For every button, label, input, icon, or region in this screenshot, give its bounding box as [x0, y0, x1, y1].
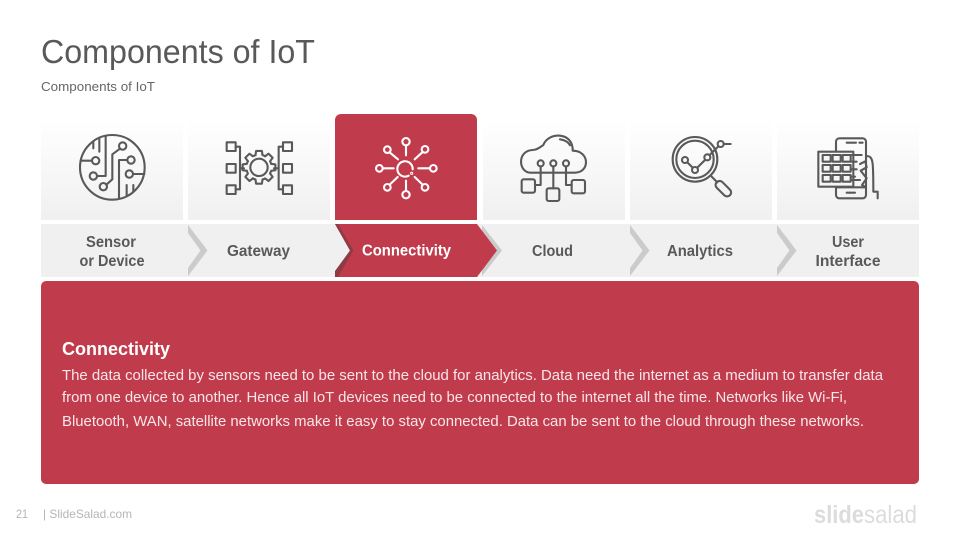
active step arrow: [335, 224, 497, 277]
icon cards: [41, 114, 919, 220]
panel: connectivity description: [41, 281, 919, 484]
icon: sensor circuit: [80, 135, 145, 200]
footer site name: | SlideSalad.com: [43, 507, 132, 521]
panel body text: The data collected by sensors need to be sent to the cloud for analytics. Data need the internet as a medium to transfer data: [62, 368, 883, 384]
label: cloud: Cloud: [532, 243, 573, 260]
label row background: [41, 224, 919, 277]
logo: slidesalad: slide: [814, 501, 864, 529]
icon: cloud network: [521, 136, 586, 201]
icon: gateway gear: [227, 142, 292, 194]
label: gateway: Gateway: [227, 243, 290, 260]
label: sensor: Sensor: [86, 234, 136, 251]
logo: slidesalad: [814, 501, 917, 529]
label: user: User: [832, 234, 864, 251]
label: connectivity: Connectivity: [362, 242, 451, 260]
logo: slidesalad: salad: [864, 501, 917, 529]
label: or device: or Device: [80, 253, 145, 270]
panel heading: Connectivity: [62, 338, 171, 359]
icon: analytics magnifier: [673, 137, 733, 198]
chevron arrows: [188, 225, 796, 276]
panel body text: from one device to another. Hence all IoT devices need to be connected to the internet all the time. Networks like Wi-Fi,: [62, 390, 847, 406]
icon: user interface phone: [818, 138, 878, 198]
panel body text: Bluetooth, WAN, satellite networks make it easy to stay connected. Data can be sent to the cloud through these networks.: [62, 414, 864, 430]
step labels: [80, 234, 881, 270]
title: Components of IoT: [41, 34, 315, 71]
panel body text: [62, 368, 883, 430]
label: analytics: Analytics: [667, 243, 733, 260]
subtitle: Components of IoT: [41, 80, 155, 94]
active arrow notch shadow: [335, 224, 354, 277]
label: interface: Interface: [816, 253, 881, 270]
icon: connectivity hub: [376, 138, 437, 198]
page number: 21: [16, 507, 28, 521]
